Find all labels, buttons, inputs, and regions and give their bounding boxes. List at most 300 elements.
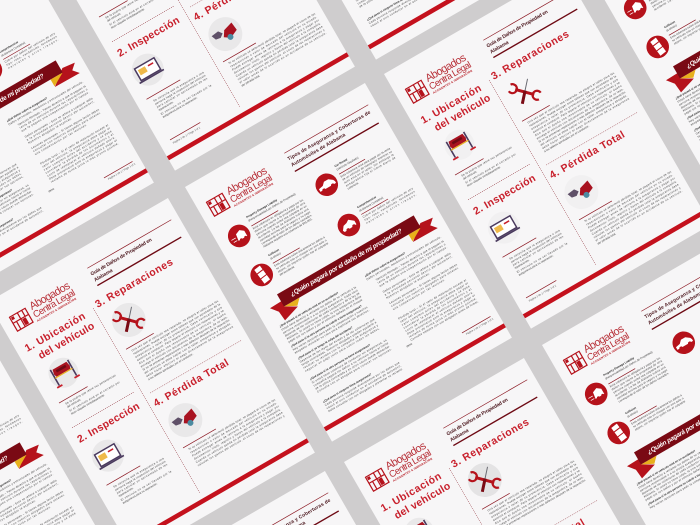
footer: Página 2 de 2 / Page 2 of 2	[528, 283, 557, 303]
section 4 text: calcular los gastos del vehículo, el costo de las reparaciones y	[593, 185, 682, 239]
left column text: Depende de las leyes del estado y de las coberturas que	[299, 317, 376, 364]
left column text: Cada persona responde directamente por los daños que	[324, 360, 401, 407]
collision text	[624, 383, 686, 432]
title: Tipos de Aseguranza y Coberturas de	[287, 110, 372, 162]
comprehensive text: Cubre por daños del vehículo de otro	[362, 186, 414, 219]
left column end text	[355, 0, 446, 28]
car rental text: Car Rental	[334, 157, 348, 168]
logo: ACCIDENTES & INMIGRACIÓN	[590, 339, 631, 366]
section 1 text: Si el vehículo está en el corralón por	[68, 380, 121, 413]
left column text: abogados revisarán su caso para explicarle sus derechos.	[294, 308, 370, 355]
property damage text	[641, 0, 700, 11]
left column text: ¿Qué pasa si la otra persona no tiene aseguranza?	[309, 343, 371, 381]
page: lower-right coverage sheet	[542, 241, 700, 525]
right column text: una compensación por las lesiones.	[392, 278, 446, 311]
right column text: Debe presentarse ante la aseguranza y pagar el	[406, 293, 476, 336]
section 3 text: aseguranza o taller de su preferencia. Debe verificarlo y que	[134, 305, 223, 359]
page: upper-left coverage sheet	[0, 0, 154, 287]
property damage text	[245, 186, 315, 249]
property damage text: corresponde al valor de los daños causados.	[261, 213, 313, 246]
section 3 text	[481, 457, 598, 525]
section 3 text: reparaciones. Puede escoger entre talleres que son aprobados de la	[528, 74, 617, 128]
car rental text: aseguradora fija el límite diario de	[345, 155, 397, 188]
property damage text: Property Damage Liability	[602, 356, 635, 377]
section 3 text: del vehículo se debe hablar con el taller, aseguranza y abogado.	[143, 321, 232, 375]
icon: car rental circle	[311, 169, 342, 200]
right column text: Consulte siempre con sus abogados antes de firmar.	[410, 299, 479, 342]
right column text: costo de reemplazar el vehículo dañado ahora.	[46, 135, 116, 178]
comprehensive text	[0, 404, 24, 452]
section 4 text: Cuando un vehículo queda en pérdida total la aseguranza debe	[235, 24, 324, 78]
title	[244, 493, 339, 525]
title	[483, 0, 577, 58]
section 2 text	[503, 225, 570, 279]
page: lower-left coverage sheet	[0, 310, 118, 525]
icon: wrench	[506, 74, 543, 110]
property damage text: Property Damage Liability	[245, 198, 278, 219]
collision text: (Colisión)	[626, 409, 639, 419]
banner	[0, 53, 82, 169]
right column text: consultar con nuestros abogados para obtener.	[32, 110, 102, 153]
left column text: ¿Qué pasa si la otra persona no cubrió o tiene aseguranza?	[290, 304, 363, 348]
icon: wrench	[462, 457, 508, 503]
section 4 text	[183, 396, 286, 469]
left column text	[0, 162, 45, 255]
footer: Página 1 de 2 / Page 1 of 2	[107, 161, 137, 181]
right column text	[0, 458, 77, 525]
collision text: del accidente.	[279, 264, 296, 277]
section 3 text: reparaciones. Puede escoger entre talleres que son aprobados de la	[488, 462, 577, 516]
title	[87, 220, 181, 286]
heading: vehicle location: 1. Ubicación	[419, 83, 484, 127]
right column text: Debe presentarse ante la aseguranza y pagar el	[48, 138, 118, 181]
right column text: Vehículo Rentado – Tienes derecho a que te paguen la	[375, 239, 445, 282]
right column text: Daños personales – Esto se refiere a cualquier daño	[24, 96, 94, 139]
section 3 text: debe hacer efectivo el pago directamente de la aseguranza	[541, 96, 630, 150]
section 3 text: Si no se presentan reparaciones o más defectos después de la reparación	[142, 318, 230, 372]
comprehensive text	[356, 177, 418, 225]
section 1 text: del vehículo.	[462, 169, 478, 181]
logo: ACCIDENTES & INMIGRACIÓN	[432, 68, 473, 95]
section 2 text: El vehículo no se ser llevado por la	[160, 83, 212, 116]
section 1 text	[58, 368, 134, 428]
property damage text: (Responsabilidad por Daños de Propiedad)	[604, 350, 653, 381]
section 3 text	[125, 297, 242, 393]
section 2 text: para calcular un aproximado de las	[156, 76, 209, 109]
right column text: Nuestros abogados le explican.	[27, 116, 73, 145]
vertical divider	[133, 0, 240, 107]
title	[641, 263, 700, 329]
red stripe	[368, 0, 550, 49]
section 4 text: el valor antes de lo ocurrido en un accidente de su vehículo.	[595, 189, 683, 242]
title: Guía de Daños de Propiedad en	[90, 237, 153, 277]
section 3 text: Una vez que el vehículo sea reparado, se elegirá el taller para las	[486, 459, 576, 512]
section 4 text: calcular los gastos del vehículo, el costo de las reparaciones y	[197, 413, 286, 467]
section 2 text: persona haga la inspección del vehículo	[154, 73, 207, 106]
section 4 text: calcular los gastos del vehículo, el costo de las reparaciones y	[237, 27, 326, 81]
left column text: Debe consultar con sus abogados y presentar su reclamo.	[327, 367, 404, 413]
section 1 text: favor sáquelo inmediatamente.	[70, 393, 106, 416]
car rental text	[334, 136, 398, 191]
logo: ACCIDENTES & INMIGRACIÓN	[36, 296, 77, 323]
title: Alabama	[93, 268, 114, 283]
heading: repairs: 3. Reparaciones	[490, 29, 571, 83]
icon: laptop	[86, 434, 130, 477]
right column text: valor del vehículo, la aseguranza debe pagar el	[41, 126, 111, 169]
section 2 text	[107, 453, 174, 507]
collision text: Collision	[624, 406, 637, 415]
bullets: section 1: del vehículo.	[106, 11, 122, 23]
section 3 text: dice que el dueño sea responsable de su vehículo, el dueño	[534, 84, 623, 137]
logo: Centra Legal	[228, 173, 274, 206]
collision text: (Colisión)	[665, 23, 678, 33]
section 2 text: reparaciones.	[158, 100, 175, 112]
section 3 text: reparaciones. Puede escoger entre talleres que son aprobados de la	[132, 302, 221, 356]
section 3 text	[521, 69, 638, 165]
right column text: reclamo de forma justa lo más pronto posible.	[50, 141, 120, 184]
icon: laptop	[126, 48, 170, 91]
bullets: section 1: favor sáquelo inmediatamente.	[110, 7, 146, 30]
logo: ACCIDENTES & INMIGRACIÓN	[392, 456, 433, 483]
section 2 text: El vehículo no se ser llevado por la	[120, 469, 172, 502]
title: Guía de Daños de Propiedad en	[446, 397, 509, 437]
right column text: consultar con nuestros abogados para obtener.	[390, 265, 460, 308]
title: Guía de Daños de Propiedad en	[486, 9, 549, 49]
comprehensive text: Comprehensive	[356, 195, 377, 209]
logo: Centra Legal	[31, 288, 77, 321]
right column text: Daños personales, mecánicos y estructurales del vehículo.	[8, 80, 84, 126]
section 2 text: persona haga la inspección del vehículo	[510, 231, 563, 264]
section 1 text: Se la podría que retire sus pertenencias	[460, 145, 513, 178]
page: lower-middle coverage sheet	[145, 471, 472, 525]
collision text	[267, 225, 331, 277]
section 4 text: Puede entregar antes de retirarlo a la aseguranza y pagar por	[587, 176, 676, 230]
icon: wrench	[106, 297, 152, 343]
page: top-right coverage sheet	[581, 0, 700, 214]
section 3 text: Si no se presentan reparaciones o más defectos después de la reparación	[538, 90, 626, 144]
banner	[662, 0, 700, 96]
section 4 text: reparaciones o valor de mercado del vehículo en su estado.	[229, 15, 318, 68]
red stripe	[167, 52, 349, 160]
section 2 text: para calcular un aproximado de las	[512, 234, 565, 267]
page: top coverage sheet	[229, 0, 556, 60]
comprehensive text: tipo: robo, vandalismo, fenómenos	[363, 189, 416, 222]
left column text	[278, 281, 404, 413]
collision text: Esta cobertura cubre únicamente los daños a	[273, 235, 326, 268]
property damage text: daños que cause a la propiedad de otra	[254, 201, 306, 233]
left column text: pagar por sus daños y por el vehículo dañado en el choque.	[287, 297, 364, 344]
property damage text: Esta cobertura es obligatoria y paga por los	[609, 356, 662, 388]
left column text: resolver su reclamo con la compañía de aseguranza y	[302, 323, 379, 370]
logo: Centra Legal	[387, 448, 433, 481]
property damage text: daños que cause a la propiedad de otra	[611, 359, 663, 391]
page: upper-right guide sheet	[384, 0, 700, 329]
heading: vehicle location	[23, 310, 97, 366]
section 3 text: a los talleres aprobados por el conductor.	[543, 124, 590, 153]
section 3 text: aseguranza o taller de su preferencia. Debe verificarlo y que	[490, 465, 579, 519]
footer: Página 1 de 2 / Page 1 of 2	[465, 316, 495, 336]
page: lower guide sheet	[344, 358, 671, 525]
section 3 text: Una vez que el vehículo sea reparado, se elegirá el taller para las	[130, 299, 220, 352]
icon: car lift	[399, 512, 440, 525]
left column text: persona responsable o a su propia aseguranza. Cada caso	[282, 288, 359, 335]
left column text: compañía pagará los daños a su vehículo hasta el límite	[313, 341, 389, 388]
right column text: considerar la pérdida de los documentos y el	[403, 287, 472, 330]
logo: Abogados	[581, 323, 627, 356]
collision text: (Colisión)	[269, 251, 282, 261]
property damage text: persona cuando usted sea culpable en un	[612, 362, 665, 394]
right column text: valor del vehículo, la aseguranza debe pagar el	[399, 281, 469, 324]
logo: Abogados	[383, 440, 429, 473]
heading: vehicle location: 1. Ubicación	[23, 311, 88, 355]
icon: car lift	[439, 124, 480, 165]
section 4 text: documentos: título, registro y llaves del vehículo a la compañía.	[193, 407, 282, 461]
section 4 text: Cuando un vehículo queda en pérdida total la aseguranza debe	[195, 410, 284, 464]
logo	[364, 439, 435, 494]
left column text: ¿Qué pasa si yo tengo la culpa del accidente?	[297, 325, 354, 360]
section 4 text: documentos: título, registro y llaves del vehículo a la compañía.	[589, 179, 678, 233]
section 4 text: dar pérdida total.	[596, 231, 617, 246]
collision text: objeto, sin importar quién fue el culpable	[277, 241, 329, 274]
comprehensive text: naturales y otros riesgos.	[7, 37, 60, 70]
icon: property damage circle	[620, 0, 651, 23]
icon: crash	[162, 397, 209, 443]
section 4 text: dar pérdida total.	[240, 73, 261, 88]
car rental text: Esta cobertura sirve para pagar por la renta	[340, 146, 391, 178]
footer: Página 2 de 2 / Page 2 of 2	[172, 125, 201, 145]
vertical divider	[93, 308, 200, 493]
right column text: debe.	[405, 341, 414, 348]
title: Alabama	[489, 40, 510, 55]
section 4 text	[223, 10, 329, 90]
collision text: Collision	[267, 248, 280, 257]
section 3 text: autorizó el conductor. Para reparar el vehículo con reparaciones y se	[532, 80, 621, 134]
right column text: que te paguen una compensación por el tiempo.	[20, 90, 90, 133]
car rental text: de un vehículo de reemplazo mientras su	[341, 149, 393, 182]
right column text: renta de un vehículo durante las reparaciones o	[377, 242, 447, 285]
section 3 text: dice que el dueño sea responsable de su vehículo, el dueño	[494, 472, 583, 525]
icon: crash	[558, 169, 605, 215]
comprehensive text: naturales y otros riesgos.	[365, 192, 418, 225]
section 2 text: aseguranza para su reparación.	[518, 253, 554, 277]
right column text: a la propiedad personal dentro del automóvil.	[26, 99, 95, 142]
icon: car rental circle	[668, 327, 699, 358]
left column text: tenga contratadas. Nuestros abogados pueden ayudarle a	[301, 320, 377, 367]
banner	[0, 435, 45, 525]
title	[443, 380, 537, 446]
heading: inspection: 2. Inspección	[116, 15, 182, 60]
left column text: de la póliza contratada y en otros casos puede demandar.	[314, 344, 391, 391]
right column text: valor completo antes del accidente y se debe	[401, 284, 471, 327]
title: Alabama	[449, 428, 470, 443]
property damage text: corresponde al valor de los daños causados.	[618, 371, 670, 404]
section 2 text: Se necesita que la aseguranza o una	[112, 456, 165, 489]
right column text: a la propiedad personal dentro del automóvil.	[384, 254, 453, 297]
section 3 text: dice que el dueño sea responsable de su vehículo, el dueño	[138, 312, 227, 365]
right column text	[6, 76, 123, 194]
section 4 text: documentos: título, registro y llaves del vehículo a la compañía.	[233, 21, 322, 75]
section 4 text: Si su vehículo se determinó pérdida total, se pagará el costo de las	[583, 169, 673, 223]
page: upper-middle guide sheet	[28, 0, 355, 171]
left column text: ¿Qué pasará si mi vehículo está en un accidente?	[635, 449, 696, 486]
section 4 text: reparaciones o valor de mercado del vehículo en su estado.	[189, 401, 278, 454]
section 4 text: Cuando un vehículo queda en pérdida total la aseguranza debe	[591, 182, 680, 236]
logo: Centra Legal	[585, 331, 631, 364]
section 4 text: Puede entregar antes de retirarlo a la aseguranza y pagar por	[231, 18, 320, 72]
section 2 text	[147, 67, 214, 121]
section 1 text: Si el vehículo está en el corralón por	[464, 152, 517, 185]
icon: collision circle	[246, 259, 277, 290]
icon: laptop	[482, 206, 526, 249]
heading: vehicle location: 1. Ubicación	[379, 471, 444, 515]
left column text: negociar un pago justo para cubrir todos los daños.	[304, 326, 381, 373]
right column text: valor completo antes del accidente y se debe	[43, 129, 113, 172]
footer	[170, 122, 203, 145]
right column text: ¿Qué daños cubre la aseguranza?	[6, 96, 48, 123]
icon: collision circle	[642, 31, 673, 62]
right column text: costo de reemplazar el vehículo dañado ahora.	[404, 290, 474, 333]
heading: inspection: 2. Inspección	[76, 401, 142, 446]
left column text: Consulte con un abogado para conocer sus opciones.	[316, 347, 393, 394]
logo: Centra Legal	[427, 60, 473, 93]
left column text: Hay varias opciones para pedir la compensación y nuestros	[292, 305, 369, 352]
property damage text: persona cuando usted sea culpable en un	[255, 204, 308, 236]
section 4 text: Si su vehículo se determinó pérdida total, se pagará el costo de las	[227, 11, 317, 65]
right column text: considerar la pérdida de los documentos y el	[45, 132, 114, 175]
red stripe	[127, 438, 309, 525]
heading: vehicle location: del vehículo	[393, 481, 453, 522]
section 4 text	[579, 168, 685, 248]
icon: crash	[202, 11, 249, 57]
collision text: su vehículo tras un choque con otro auto u	[275, 238, 328, 271]
car rental text: auto está en el taller. Sin embargo la	[343, 152, 395, 185]
section 3 text: autorizó el conductor. Para reparar el vehículo con reparaciones y se	[136, 308, 225, 362]
section 3 text: del vehículo se debe hablar con el taller, aseguranza y abogado.	[539, 93, 628, 147]
right column text: Pérdida total – Si el valor de reparación excede el	[39, 123, 109, 166]
page: lower-left guide sheet	[0, 198, 315, 525]
section 3 text: debe hacer efectivo el pago directamente de la aseguranza	[145, 324, 234, 378]
section 4 text: reparaciones o valor de mercado del vehículo en su estado.	[585, 173, 674, 226]
section 2 text: reparaciones.	[118, 486, 135, 498]
section 2 text: aseguranza para su reparación.	[122, 481, 158, 505]
heading: vehicle location: del vehículo	[433, 93, 493, 134]
section 3 text: entrega el vehículo con documentos de la aseguranza, de su lado.	[140, 315, 228, 368]
comprehensive text: Cubre por daños del vehículo de otro	[4, 31, 56, 64]
right column text: Daños personales, mecánicos y estructurales del vehículo.	[366, 235, 442, 281]
banner	[266, 208, 440, 324]
section 4 text: el valor antes de lo ocurrido en un accidente de su vehículo.	[239, 31, 327, 84]
comprehensive text	[0, 22, 60, 70]
section 3 text: a los talleres aprobados por el conductor.	[147, 352, 194, 381]
right column text: Pérdida total – Si el valor de reparación excede el	[397, 278, 467, 321]
icon: car lift	[43, 352, 84, 393]
collision text: su vehículo tras un choque con otro auto u	[632, 396, 685, 429]
icon: property damage circle	[224, 221, 255, 251]
property damage text: accidente. La ley de Alabama indica una	[614, 365, 667, 397]
left column text: causó al otro conductor en el accidente de automóvil.	[326, 363, 402, 410]
title: Automóviles de Alabama	[290, 132, 347, 168]
left column text: Usted tiene derecho a reclamar los daños de su vehículo a la	[280, 285, 357, 332]
left column text: depende de las coberturas de cada conductor y de la ley de	[284, 291, 361, 338]
section 2 text: Se necesita que la aseguranza o una	[508, 228, 561, 261]
logo: Abogados	[224, 165, 270, 198]
right column text: debe.	[47, 186, 56, 193]
section 2 text: Se necesita que la aseguranza o una	[152, 70, 205, 103]
heading: repairs: 3. Reparaciones	[450, 417, 531, 471]
section 1 text: favor sáquelo inmediatamente.	[466, 165, 502, 188]
left column text	[674, 53, 700, 145]
section 3 text: autorizó el conductor. Para reparar el vehículo con reparaciones y se	[492, 468, 581, 522]
section 2 text: persona haga la inspección del vehículo	[114, 459, 167, 492]
logo: ACCIDENTES & INMIGRACIÓN	[233, 181, 274, 208]
logo	[205, 164, 276, 219]
heading: inspection: 2. Inspección	[472, 173, 538, 218]
comprehensive text: tipo: robo, vandalismo, fenómenos	[5, 34, 58, 67]
heading: repairs: 3. Reparaciones	[94, 257, 175, 311]
banner: ¿Quién pagará por el daño de mi propiedad?	[289, 228, 404, 298]
banner	[623, 373, 700, 482]
right column text: una compensación por las lesiones.	[34, 123, 88, 156]
section 2 text: reparaciones.	[514, 258, 531, 270]
right column text: ¿Qué daños cubre la aseguranza?	[364, 251, 406, 278]
right column text: Lesiones personales – Si tienes alguna lesión debes	[388, 262, 458, 305]
heading: vehicle location: del vehículo	[37, 321, 97, 362]
car rental text: (Vehículo Alquilado)	[336, 156, 359, 172]
section 3 text	[181, 0, 281, 7]
left column text: Alabama. Si usted no tiene culpa, la otra aseguranza debe	[286, 294, 362, 341]
property damage text: (Responsabilidad por Daños de Propiedad)	[247, 192, 296, 223]
heading: vehicle location	[419, 82, 493, 138]
section 2 text: aseguranza para su reparación.	[162, 95, 198, 119]
vertical divider	[489, 80, 596, 265]
comprehensive text: (Cobertura Completa)	[0, 41, 26, 58]
section 4 text: Si su vehículo se determinó pérdida total, se pagará el costo de las	[187, 397, 277, 451]
right column text: Nuestros abogados le explican.	[385, 271, 431, 300]
left column text	[635, 439, 700, 510]
left column text: ¿Qué pasará si mi vehículo está en un accidente?	[278, 291, 339, 328]
icon: collision circle	[603, 417, 634, 448]
bullets: section 1	[98, 0, 174, 42]
section 3 text: Una vez que el vehículo sea reparado, se elegirá el taller para las	[526, 71, 616, 124]
property damage text: cantidad mínima para el seguro y su pago	[259, 210, 311, 242]
right column text: reclamo de forma justa lo más pronto posible.	[408, 296, 478, 339]
red stripe	[324, 323, 506, 431]
collision text: Esta cobertura cubre únicamente los daños a	[630, 393, 683, 426]
property damage text: Alabama requiere una cobertura de $25,000.	[262, 217, 313, 249]
heading: total loss: 4. Pérdida Total	[152, 358, 231, 410]
section 1 text	[454, 140, 530, 200]
vertical divider	[449, 468, 556, 525]
footer	[526, 280, 559, 303]
right column text: Vehículo Rentado – Tienes derecho a que te paguen la	[17, 84, 87, 127]
property damage text: Esta cobertura es obligatoria y paga por los	[252, 198, 305, 230]
icon: comprehensive circle	[333, 210, 364, 241]
section 3 text: aseguranza o taller de su preferencia. Debe verificarlo y que	[530, 77, 619, 131]
car rental text: cobertura.	[347, 181, 360, 191]
logo	[8, 279, 79, 334]
heading: vehicle location	[379, 470, 453, 525]
right column text: renta de un vehículo durante las reparaciones o	[19, 87, 89, 130]
logo: Abogados	[27, 280, 73, 313]
right column text: Daños personales – Esto se refiere a cualquier daño	[382, 251, 452, 294]
icon: comprehensive circle	[0, 55, 6, 86]
right column text: Lesiones personales – Si tienes alguna lesión debes	[30, 107, 100, 150]
section 1 text: del vehículo.	[66, 397, 82, 409]
comprehensive text: (Cobertura Completa)	[358, 196, 384, 213]
red stripe	[0, 168, 148, 276]
property damage text	[602, 344, 670, 404]
left column text: ¿Qué pasa si ninguno tiene aseguranza?	[322, 372, 372, 404]
